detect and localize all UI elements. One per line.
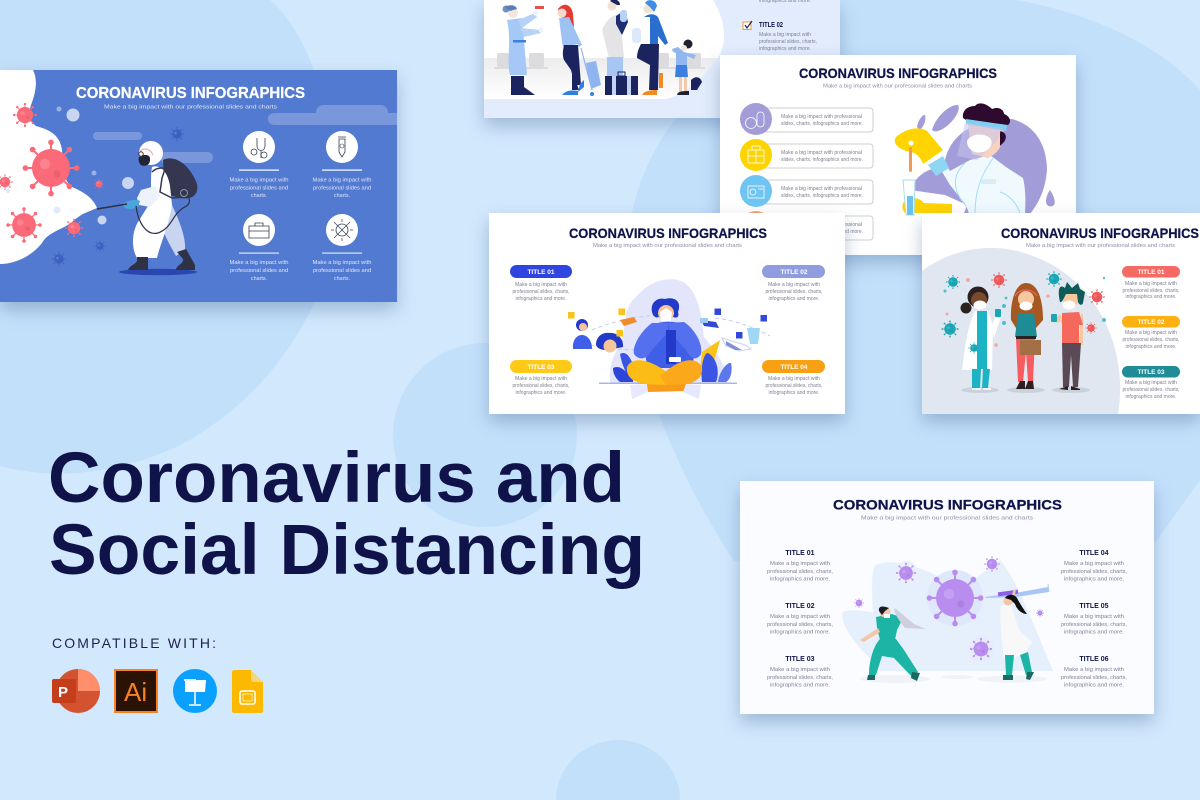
- title 03: TITLE 03: [527, 364, 555, 371]
- slide heading: Make a big impact with our professional slides and charts: [1026, 243, 1175, 249]
- checklist item: [743, 0, 817, 52]
- feature: vaccine vial: Make a big impact with: [312, 178, 372, 184]
- small figures and objects: [573, 317, 760, 352]
- child with bag: [672, 40, 702, 95]
- feature: vaccine vial: [312, 131, 372, 199]
- slide: anxious person: [489, 213, 845, 414]
- slide heading: CORONAVIRUS INFOGRAPHICS: [569, 225, 767, 241]
- icon: PowerPoint: [52, 669, 100, 713]
- slide: airport queue: [484, 0, 840, 118]
- slide: doctors fighting virus: [740, 481, 1154, 714]
- feature: crossed virus: charts.: [334, 276, 350, 282]
- doctor: [960, 286, 1001, 393]
- title 06: Make a big impact with: [1064, 667, 1124, 673]
- title 04: TITLE 04: [780, 364, 808, 371]
- slide heading: CORONAVIRUS INFOGRAPHICS: [833, 496, 1062, 512]
- title 01: [1122, 266, 1180, 300]
- title 04: [1061, 550, 1127, 582]
- title 02: infographics and more.: [768, 296, 820, 302]
- feature: stethoscope: Make a big impact with: [230, 178, 289, 184]
- title 05: infographics and more.: [1064, 630, 1124, 636]
- list row 4: Make a big impact with professional: [781, 222, 862, 228]
- title 01: TITLE 01: [785, 550, 815, 557]
- title 01: [767, 550, 833, 582]
- title 02: TITLE 02: [1137, 319, 1165, 326]
- slide heading: Make a big impact with our professional slides and charts: [593, 243, 742, 249]
- title 01: professional slides, charts,: [512, 289, 570, 295]
- title 03: infographics and more.: [770, 682, 830, 688]
- feature: stethoscope: professional slides and: [230, 186, 288, 192]
- icon: Google Slides: [232, 670, 263, 713]
- title 06: [1061, 656, 1127, 688]
- feature: stethoscope: [230, 131, 289, 199]
- title 04: infographics and more.: [768, 390, 820, 396]
- feature: crossed virus: [312, 214, 372, 282]
- pale backdrop: [842, 560, 1053, 671]
- list row 1: Make a big impact with professional: [781, 114, 862, 120]
- slide heading: Make a big impact with our professional slides and charts: [861, 516, 1033, 522]
- title 01: [510, 265, 572, 302]
- icon: PowerPoint: P: [58, 684, 68, 701]
- list row 3: Make a big impact with professional: [781, 186, 862, 192]
- icon: Keynote: [173, 669, 217, 713]
- title 02: infographics and more.: [770, 630, 830, 636]
- man with thumbs up: [1051, 282, 1090, 393]
- title 04: professional slides, charts,: [766, 383, 822, 389]
- ground shadows: [860, 675, 1047, 683]
- feature: vaccine vial: charts.: [334, 193, 350, 199]
- pale backdrop: [922, 248, 1120, 414]
- meditating person illustration: [568, 279, 770, 399]
- main title: Social Distancing: [49, 511, 645, 590]
- main title: [48, 439, 645, 590]
- slide heading: [76, 85, 305, 110]
- title 02: TITLE 02: [785, 603, 815, 610]
- title 03: professional slides, charts,: [512, 383, 570, 389]
- checklist item: TITLE 02: [759, 22, 783, 29]
- title 02: professional slides, charts,: [1122, 337, 1180, 343]
- slide: disinfecting worker: [0, 70, 397, 302]
- feature: vaccine vial: professional slides and: [313, 186, 371, 192]
- waiting chairs: [494, 53, 705, 69]
- title 03: [1122, 366, 1180, 400]
- title 02: [767, 603, 833, 636]
- title 03: infographics and more.: [516, 390, 566, 396]
- title 05: [1061, 603, 1127, 636]
- worker in protective suit: [97, 141, 197, 275]
- title 06: infographics and more.: [1064, 682, 1124, 688]
- title 01: Make a big impact with: [1125, 281, 1177, 287]
- slide heading: [1001, 225, 1199, 249]
- woman with bag: [1007, 283, 1045, 393]
- woman in blue coat: [632, 0, 668, 95]
- title 01: infographics and more.: [516, 296, 566, 302]
- man with luggage: [602, 0, 638, 95]
- feature: stethoscope: charts.: [251, 193, 267, 199]
- slide: scientist and icon list: [720, 55, 1076, 255]
- nurse with thermometer: [502, 5, 544, 95]
- feature: medical case: [230, 214, 289, 282]
- title 04: professional slides, charts,: [1061, 569, 1127, 575]
- title 03: Make a big impact with: [1125, 380, 1177, 386]
- check badges: [568, 308, 767, 338]
- purple viruses: [854, 556, 1044, 662]
- title 01: TITLE 01: [1137, 269, 1165, 276]
- feature: crossed virus: professional slides and: [313, 268, 371, 274]
- title 03: TITLE 03: [1137, 369, 1165, 376]
- list row 4: slides, charts, infographics and more.: [781, 229, 863, 235]
- checklist item: Make a big impact with: [759, 32, 811, 38]
- slide heading: CORONAVIRUS INFOGRAPHICS: [76, 85, 305, 102]
- title 01: Make a big impact with: [515, 282, 567, 288]
- title 02: infographics and more.: [1126, 344, 1176, 350]
- title 01: professional slides, charts,: [767, 569, 833, 575]
- list row 2: [740, 139, 873, 171]
- title 04: [762, 360, 825, 396]
- title 04: Make a big impact with: [768, 376, 820, 382]
- title 01: Make a big impact with: [770, 561, 830, 567]
- doctor with syringe: [985, 584, 1049, 680]
- feature: medical case: charts.: [251, 276, 267, 282]
- main title: Coronavirus and: [48, 439, 625, 518]
- icon: Illustrator: Ai: [124, 677, 147, 707]
- woman with suitcase: [558, 5, 601, 96]
- feature: crossed virus: Make a big impact with: [312, 260, 372, 266]
- title 06: TITLE 06: [1079, 656, 1109, 663]
- title 01: professional slides, charts,: [1122, 288, 1180, 294]
- scientist illustration: [895, 103, 1055, 225]
- icon: Illustrator: [115, 670, 157, 712]
- title 05: Make a big impact with: [1064, 614, 1124, 620]
- list row 3: [740, 175, 873, 207]
- title 05: TITLE 05: [1079, 603, 1109, 610]
- nurse with shield: [860, 606, 926, 681]
- title 04: Make a big impact with: [1064, 561, 1124, 567]
- title 03: infographics and more.: [1126, 394, 1176, 400]
- title 03: [767, 656, 833, 688]
- list row 4: [740, 211, 873, 243]
- feature: medical case: Make a big impact with: [230, 260, 289, 266]
- title 02: TITLE 02: [780, 269, 808, 276]
- slide heading: CORONAVIRUS INFOGRAPHICS: [799, 65, 997, 81]
- slide heading: [833, 496, 1062, 522]
- title 02: Make a big impact with: [768, 282, 820, 288]
- white spray cloud: [0, 70, 97, 264]
- checklist item: infographics and more.: [759, 46, 811, 52]
- clouds: [93, 105, 397, 163]
- list row 2: slides, charts, infographics and more.: [781, 157, 863, 163]
- list row 3: slides, charts, infographics and more.: [781, 193, 863, 199]
- list row 1: slides, charts, infographics and more.: [781, 121, 863, 127]
- title 02: Make a big impact with: [1125, 330, 1177, 336]
- title 02: professional slides, charts,: [766, 289, 822, 295]
- slide heading: Make a big impact with our professional slides and charts: [104, 104, 277, 110]
- title 03: TITLE 03: [785, 656, 815, 663]
- title 03: professional slides, charts,: [1122, 387, 1180, 393]
- title 05: professional slides, charts,: [1061, 622, 1127, 628]
- title 02: [762, 265, 825, 302]
- floating viruses: [942, 271, 1106, 347]
- slide heading: [569, 225, 767, 249]
- slide: three people in masks: [922, 213, 1200, 414]
- title 02: [1122, 316, 1180, 350]
- title 03: Make a big impact with: [515, 376, 567, 382]
- title 03: Make a big impact with: [770, 667, 830, 673]
- list row 2: Make a big impact with professional: [781, 150, 862, 156]
- feature: medical case: professional slides and: [230, 268, 288, 274]
- title 02: professional slides, charts,: [767, 622, 833, 628]
- virus cluster: [0, 103, 184, 266]
- title 01: TITLE 01: [527, 269, 555, 276]
- title 06: professional slides, charts,: [1061, 675, 1127, 681]
- slide heading: [799, 65, 997, 90]
- title 01: infographics and more.: [1126, 294, 1176, 300]
- slide heading: Make a big impact with our professional slides and charts: [823, 84, 972, 90]
- compatible with label: COMPATIBLE WITH:: [52, 635, 216, 651]
- checklist item: professional slides, charts,: [759, 39, 817, 45]
- title 04: infographics and more.: [1064, 576, 1124, 582]
- title 02: Make a big impact with: [770, 614, 830, 620]
- title 03: professional slides, charts,: [767, 675, 833, 681]
- title 03: [510, 360, 572, 396]
- list row 1: [740, 103, 873, 135]
- title 01: infographics and more.: [770, 576, 830, 582]
- title 04: TITLE 04: [1079, 550, 1109, 557]
